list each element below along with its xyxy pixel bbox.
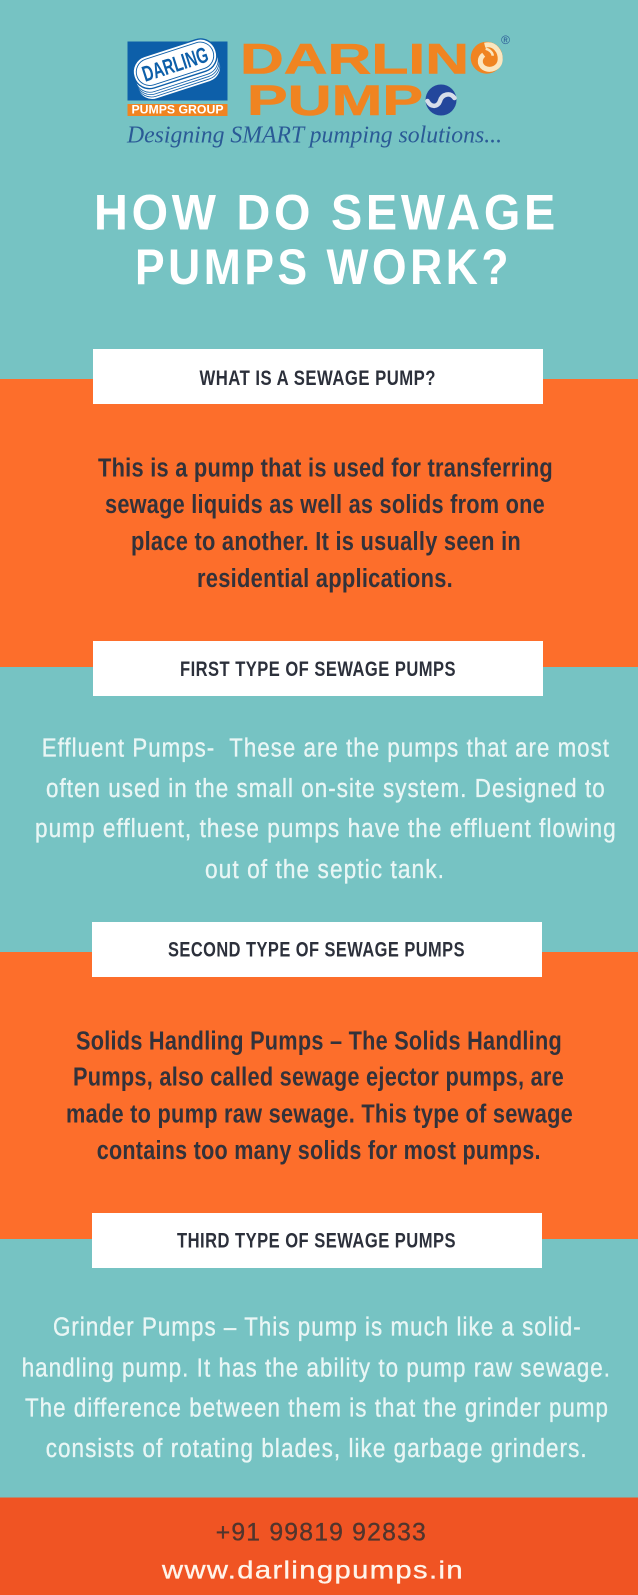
text block: solids handling pumps: Solids Handling Pumps – The Solids Handling: [76, 1027, 562, 1055]
text block: grinder pumps: [22, 1314, 611, 1463]
heading: third type of sewage pumps: [92, 1213, 542, 1268]
heading: what is a sewage pump: [93, 349, 543, 404]
text block: definition: [98, 455, 553, 593]
panel: what is a sewage pump: [0, 349, 638, 667]
title: [94, 184, 559, 295]
text block: effluent pumps: out of the septic tank.: [205, 856, 445, 884]
text block: effluent pumps: [35, 735, 617, 884]
text: website: www.darlingpumps.in: [161, 1556, 464, 1584]
icon: Darling badge: PUMPS GROUP: [132, 105, 224, 117]
icon: Darling badge: DARLING: [139, 42, 211, 87]
text block: solids handling pumps: [66, 1027, 573, 1165]
icon: orange swirl: [471, 42, 503, 74]
text block: definition: residential applications.: [197, 565, 453, 593]
text block: solids handling pumps: Pumps, also called sewage ejector pumps, are: [73, 1064, 564, 1092]
panel: second type: [0, 922, 638, 1239]
heading: what is a sewage pump: WHAT IS A SEWAGE PUMP?: [200, 367, 436, 390]
text block: definition: place to another. It is usually seen in: [131, 528, 521, 556]
heading: first type of sewage pumps: FIRST TYPE OF SEWAGE PUMPS: [180, 658, 456, 681]
text block: definition: sewage liquids as well as solids from one: [105, 491, 545, 519]
text: phone number: +91 99819 92833: [216, 1519, 427, 1547]
text block: solids handling pumps: contains too many solids for most pumps.: [97, 1137, 541, 1165]
title: HOW DO SEWAGE: [94, 184, 559, 240]
text block: definition: This is a pump that is used for transferring: [98, 455, 553, 483]
logo: Darling Pumps: [126, 33, 510, 149]
title: PUMPS WORK?: [135, 239, 512, 295]
logo wordmark: Darlin: DARLIN: [240, 35, 469, 83]
icon: blue swirl: [426, 84, 456, 116]
heading: second type of sewage pumps: [92, 922, 542, 977]
logo wordmark: Pump: PUMP: [247, 77, 423, 125]
text: registered mark: ®: [501, 33, 510, 47]
footer: contact details: [0, 1498, 638, 1595]
icon: Darling badge: [128, 35, 228, 117]
panel: third type: [22, 1213, 611, 1463]
heading: first type of sewage pumps: [93, 641, 543, 696]
text: tagline: Designing SMART pumping solutions...: [126, 123, 502, 149]
heading: third type of sewage pumps: THIRD TYPE OF SEWAGE PUMPS: [177, 1230, 456, 1253]
panel: first type: [35, 641, 617, 884]
heading: second type of sewage pumps: SECOND TYPE OF SEWAGE PUMPS: [168, 939, 465, 962]
